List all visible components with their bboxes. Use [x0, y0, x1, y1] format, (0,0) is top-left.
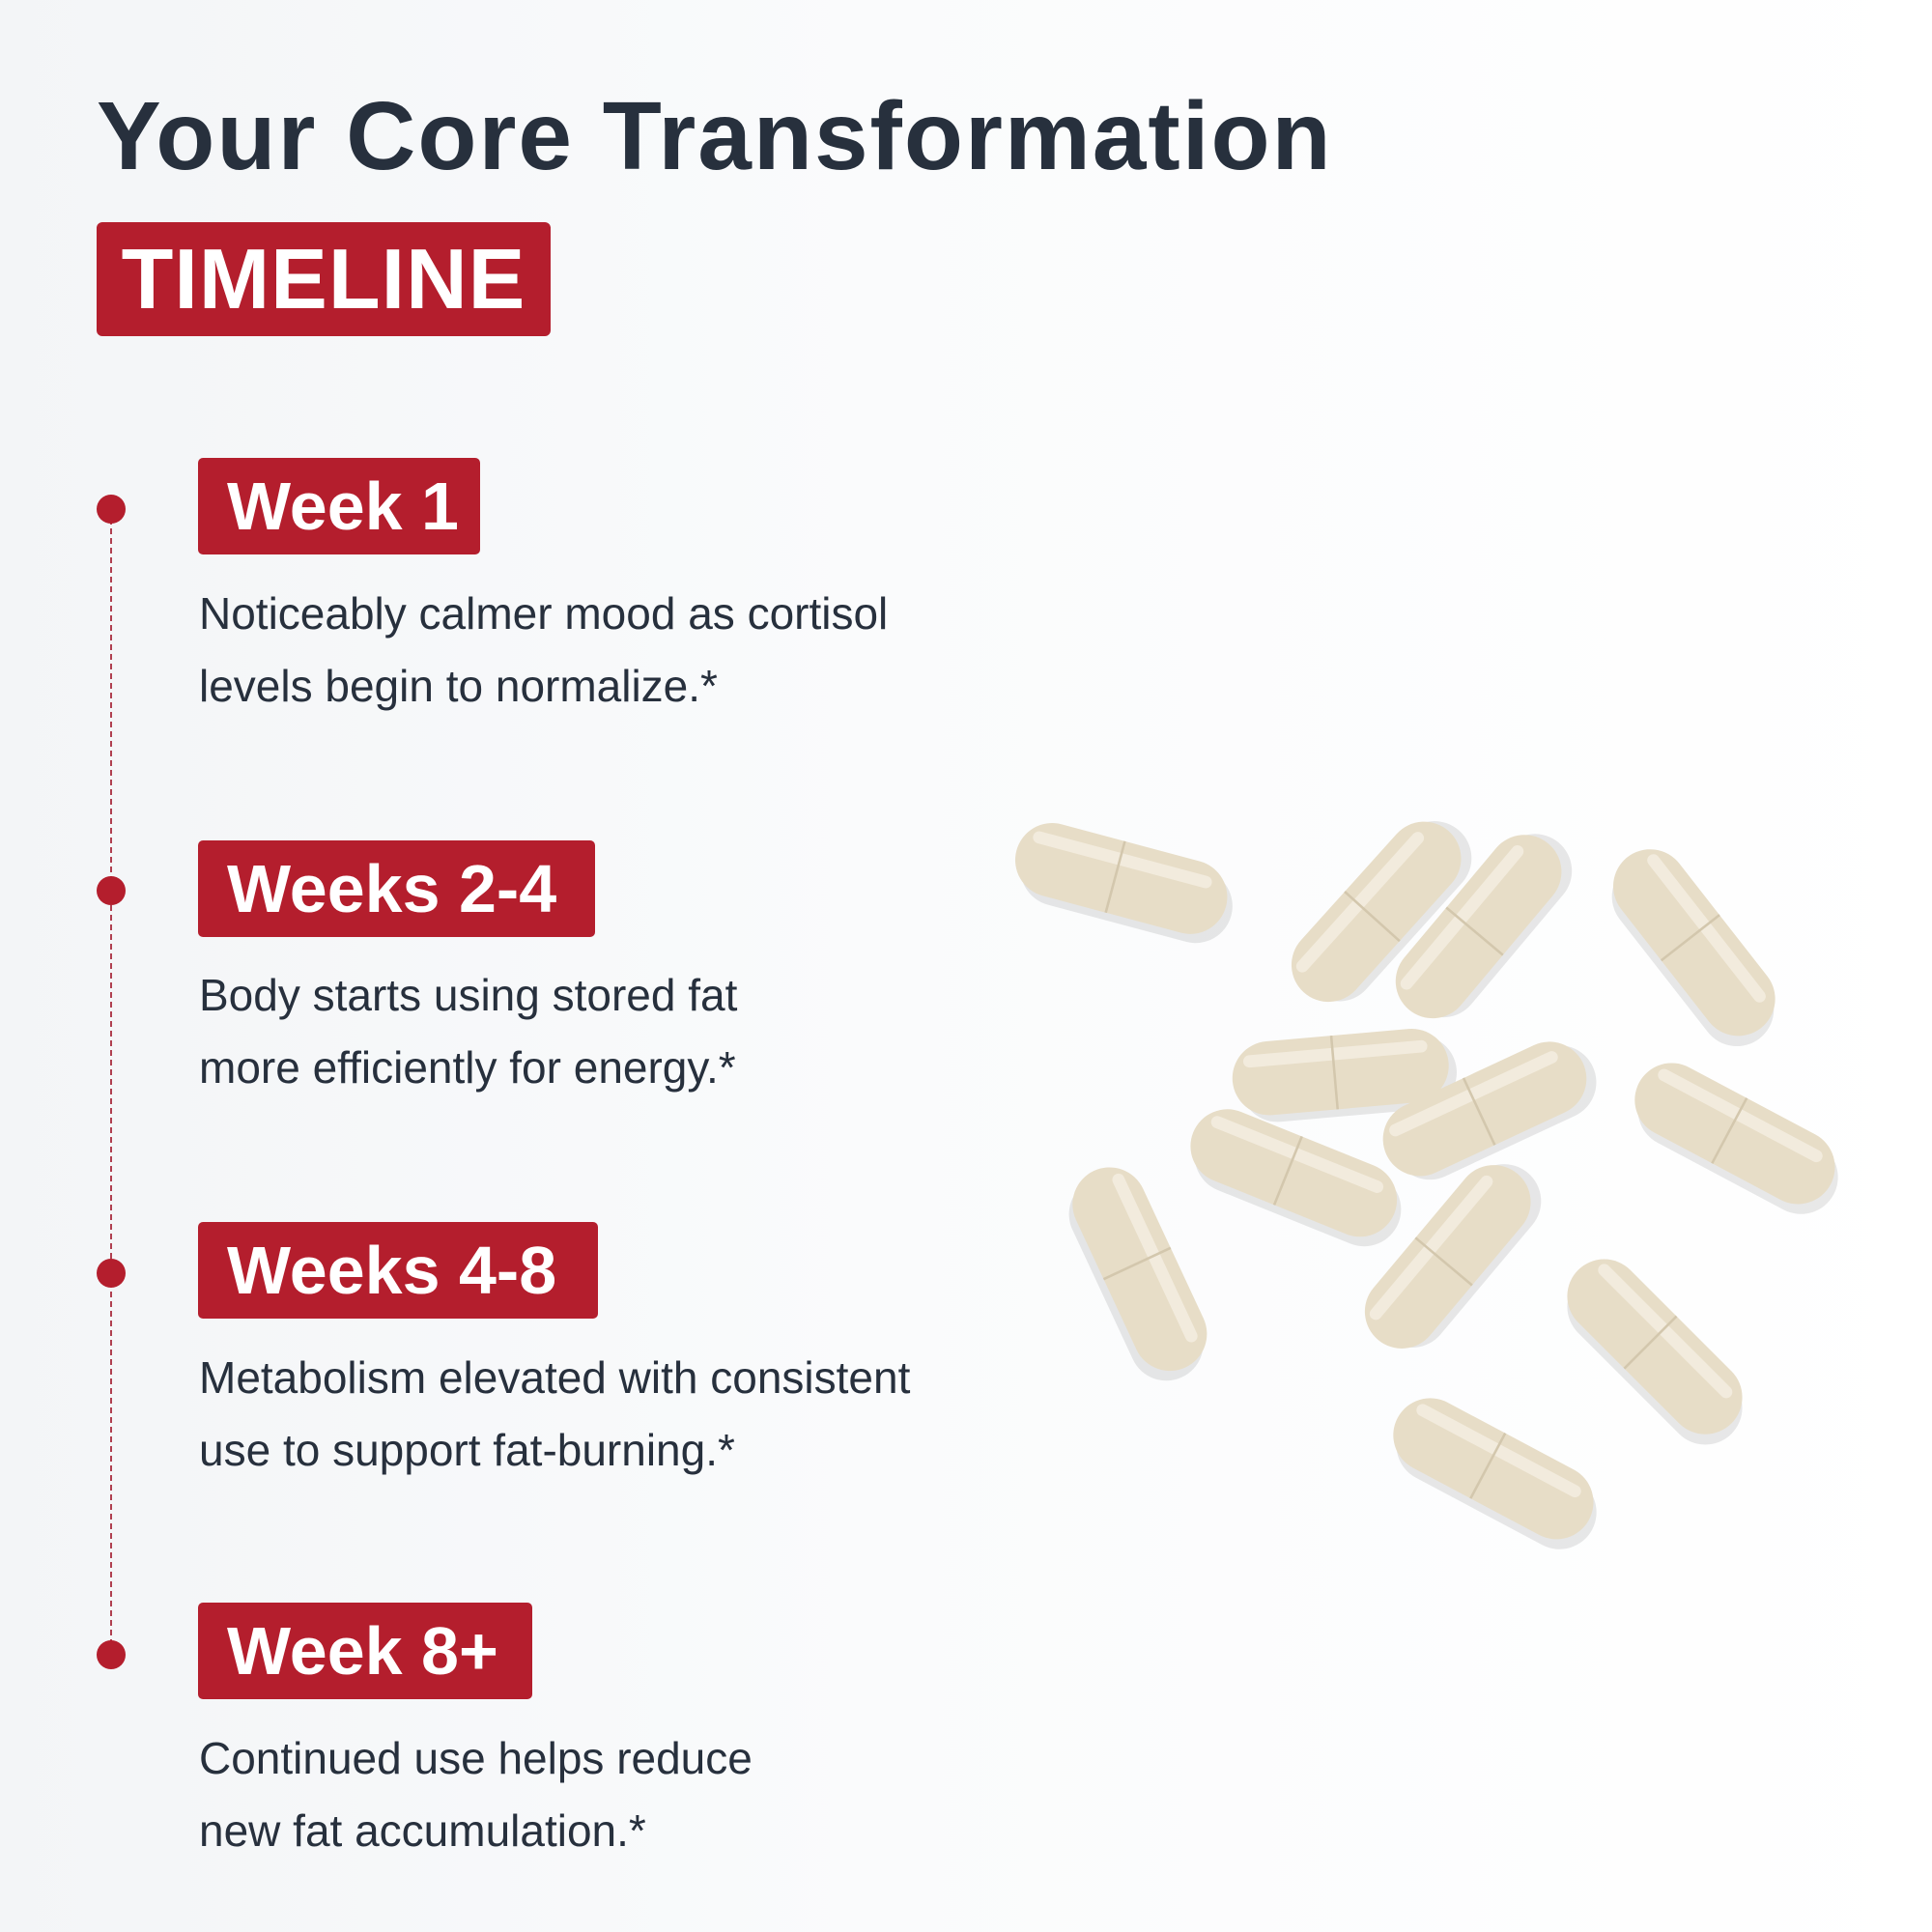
label weeks 2-4: Weeks 2-4 — [227, 851, 556, 926]
text week 8+ — [199, 1733, 753, 1856]
text weeks 2-4 — [199, 970, 738, 1093]
text week 8+: new fat accumulation.* — [199, 1805, 646, 1856]
dot week 8+ — [97, 1640, 126, 1669]
text week 1 — [199, 588, 888, 711]
dot week 1 — [97, 495, 126, 524]
text weeks 2-4: more efficiently for energy.* — [199, 1042, 736, 1093]
label weeks 4-8: Weeks 4-8 — [227, 1233, 556, 1308]
text week 1: Noticeably calmer mood as cortisol — [199, 588, 888, 639]
text weeks 2-4: Body starts using stored fat — [199, 970, 737, 1020]
text week 8+: Continued use helps reduce — [199, 1733, 753, 1783]
text weeks 4-8: use to support fat-burning.* — [199, 1425, 735, 1475]
text weeks 4-8: Metabolism elevated with consistent — [199, 1352, 910, 1403]
dot weeks 4-8 — [97, 1259, 126, 1288]
text weeks 4-8 — [199, 1352, 910, 1475]
title: Your Core Transformation — [97, 82, 1333, 190]
label weeks 2-4 — [198, 840, 595, 937]
label weeks 4-8 — [198, 1222, 598, 1319]
label week 1: Week 1 — [227, 469, 459, 544]
label week 1 — [198, 458, 480, 554]
label week 8+: Week 8+ — [227, 1613, 498, 1689]
dot weeks 2-4 — [97, 876, 126, 905]
timeline badge: TIMELINE — [122, 231, 526, 327]
text week 1: levels begin to normalize.* — [199, 661, 718, 711]
label week 8+ — [198, 1603, 532, 1699]
timeline dashed line — [110, 509, 112, 1655]
